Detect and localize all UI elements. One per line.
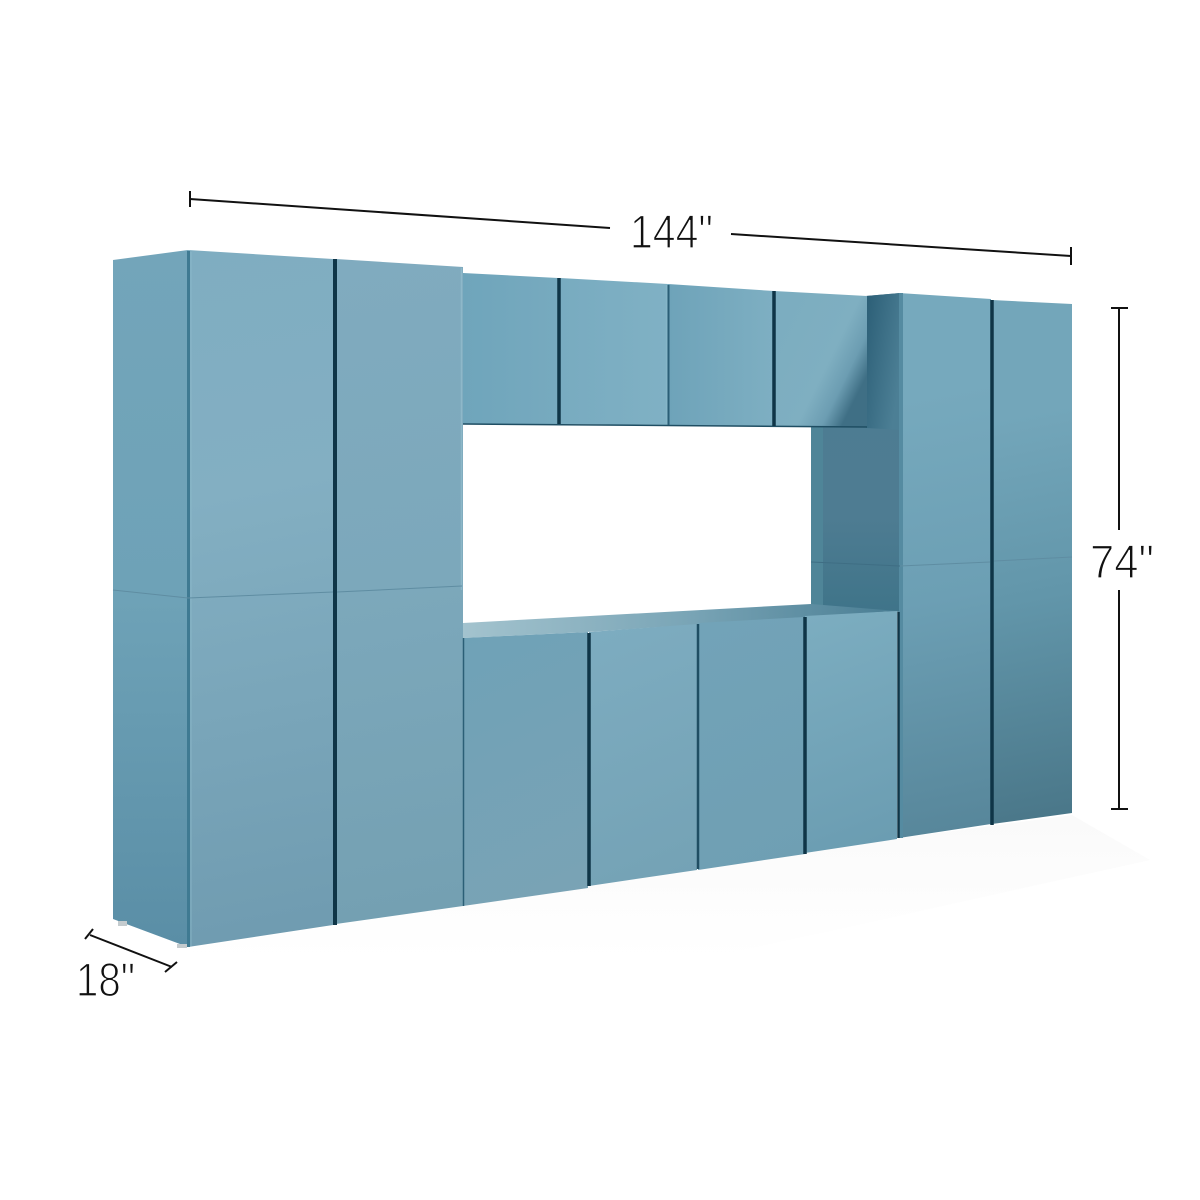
corner edge	[187, 251, 190, 947]
recess back panel	[811, 293, 900, 612]
dimension: width 144 in	[190, 191, 1071, 265]
horizontal seams	[113, 557, 1072, 598]
upper cabinet doors	[463, 273, 867, 427]
dimension: depth 18 in: 18"	[76, 953, 135, 1006]
recess light strip	[811, 426, 823, 605]
recess upper dark panel	[866, 293, 900, 430]
countertop	[463, 604, 898, 638]
door gaps	[335, 259, 992, 925]
left tower door 1	[188, 250, 333, 947]
lower cabinet doors	[463, 611, 897, 906]
floor shadow	[190, 815, 1150, 960]
right tower doors	[899, 293, 1072, 838]
dimension: depth 18 in	[76, 929, 177, 1006]
dimension: width 144 in: 144"	[630, 205, 713, 258]
dimension: height 74 in: 74"	[1090, 535, 1154, 588]
left tower side	[113, 250, 188, 947]
feet	[118, 921, 187, 948]
cabinet assembly	[113, 250, 1072, 948]
left tower door 2	[336, 259, 463, 924]
light edges	[191, 252, 666, 946]
upper cabinets bottom edge	[463, 424, 867, 427]
